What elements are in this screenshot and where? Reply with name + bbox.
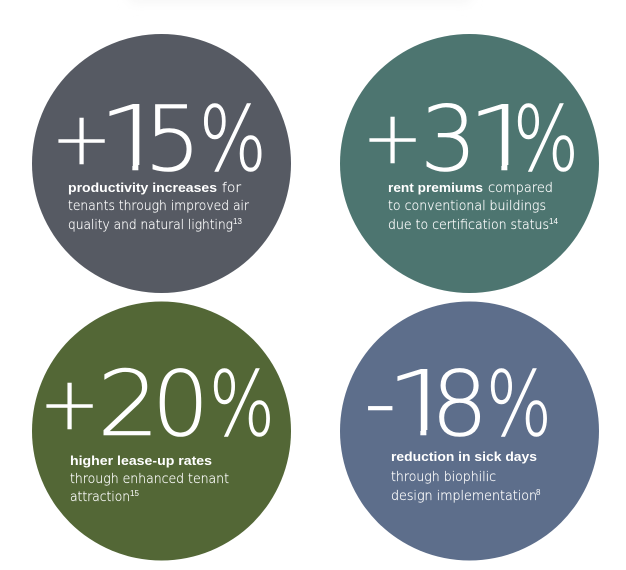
text: sick days description: design implementation xyxy=(391,489,537,504)
stat: -18%: - xyxy=(364,350,396,455)
text: productivity description: productivity increases xyxy=(68,180,217,195)
text: lease-up description: higher lease-up rates xyxy=(70,453,212,468)
text: productivity description: tenants through improved air xyxy=(68,199,250,214)
text: productivity description xyxy=(68,180,250,233)
text: productivity description: quality and natural lighting xyxy=(68,218,233,233)
text: productivity description: 13 xyxy=(233,217,242,226)
stat: +31%: % xyxy=(513,86,579,191)
stat: +15%: 5 xyxy=(144,87,201,192)
text: sick days description: 8 xyxy=(536,488,541,497)
text: lease-up description: through enhanced tenant xyxy=(70,472,229,487)
text: rent premiums description: 14 xyxy=(549,217,558,226)
text: lease-up description: attraction xyxy=(70,490,130,505)
text: productivity description: for xyxy=(222,181,242,196)
circle: lease-up xyxy=(32,302,291,560)
stat: +31%: 3 xyxy=(420,87,477,192)
stat: +15%: % xyxy=(199,88,267,192)
text: rent premiums description: rent premiums xyxy=(388,180,483,195)
stat: +20%: % xyxy=(209,351,275,456)
stat: +31%: 1 xyxy=(466,86,540,192)
text: rent premiums description: compared xyxy=(488,181,553,196)
stat: +15%: 1 xyxy=(97,86,171,192)
stat: -18%: 8 xyxy=(431,352,488,457)
text: rent premiums description: to conventional buildings xyxy=(388,199,546,214)
stat: +15% xyxy=(58,103,262,172)
stat: +31%: + xyxy=(362,96,423,181)
text: sick days description: through biophilic xyxy=(391,470,496,485)
panel: lease-up stat xyxy=(32,302,291,560)
circle: productivity xyxy=(32,34,291,293)
text: rent premiums description: due to certification status xyxy=(388,218,549,233)
stat: -18%: % xyxy=(486,351,552,456)
text: rent premiums description xyxy=(388,180,558,233)
circle: sick days xyxy=(340,302,599,560)
text: sick days description: reduction in sick days xyxy=(391,449,537,464)
stat: -18% xyxy=(368,368,547,437)
stat: +20% xyxy=(39,351,275,457)
text: sick days description xyxy=(391,449,541,504)
stat: +15%: + xyxy=(51,97,112,182)
stat: +20%: + xyxy=(39,362,100,447)
panel: rent premiums stat xyxy=(340,34,599,293)
text: lease-up description: 15 xyxy=(130,489,139,498)
panel: productivity stat xyxy=(32,34,291,293)
panel: sick days stat xyxy=(340,302,599,560)
circle: rent premiums xyxy=(340,34,599,293)
stat: -18%: 1 xyxy=(385,351,459,457)
text: lease-up description xyxy=(70,453,229,505)
stat: +20%: 2 xyxy=(97,352,160,457)
stat: +20%: 0 xyxy=(152,352,209,457)
stat: +31% xyxy=(369,103,574,172)
